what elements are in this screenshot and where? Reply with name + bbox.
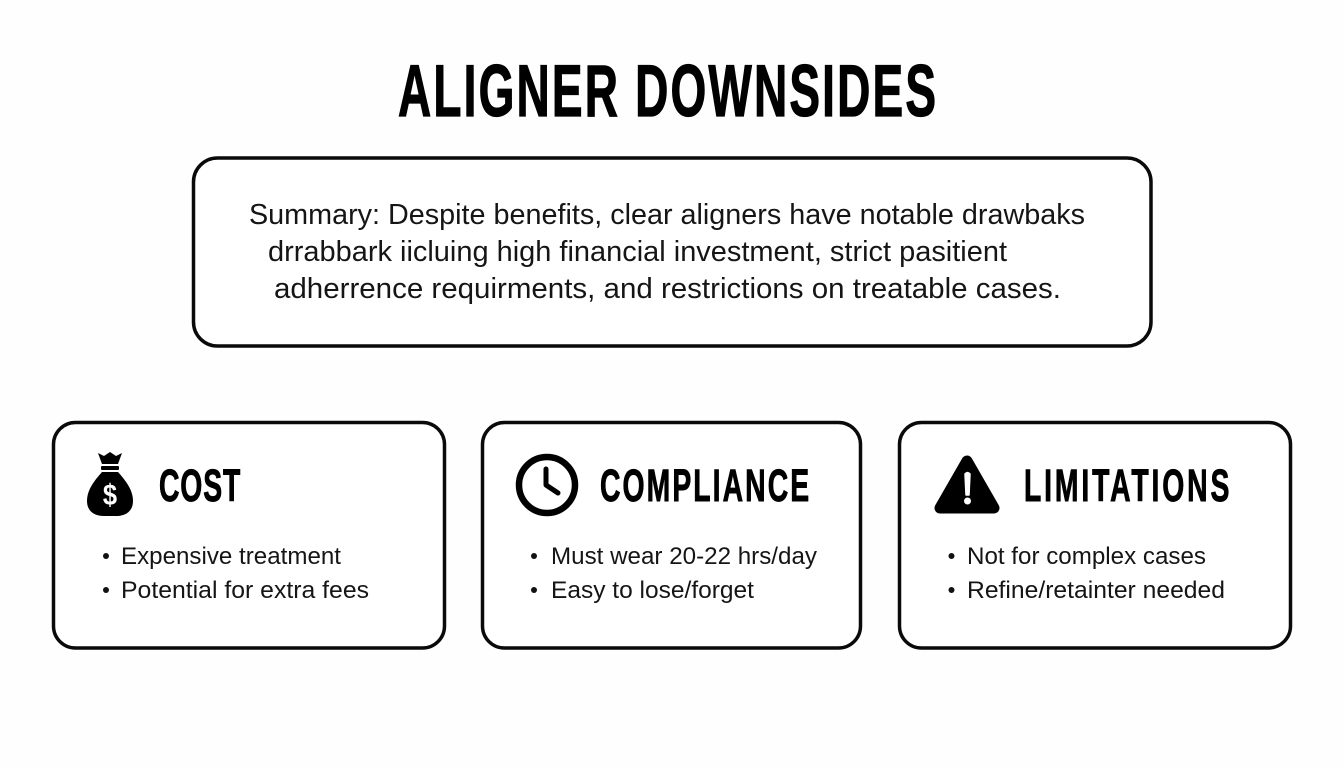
icon: clock: [519, 457, 575, 513]
summary text: drrabbark iicluing high financial investment, strict pasitient: [268, 236, 1007, 268]
bullet list: cost: Expensive treatment: [121, 543, 341, 570]
bullet list: cost: Potential for extra fees: [121, 577, 369, 604]
bullet list: limitations: Not for complex cases: [967, 543, 1206, 570]
bullet list: compliance: [531, 543, 818, 604]
bullet list: limitations: Refine/retainter needed: [967, 577, 1225, 604]
bullet list: limitations: [948, 543, 1225, 604]
bullet list: cost: [103, 543, 369, 604]
summary text: adherrence requirments, and restrictions on treatable cases.: [274, 273, 1061, 305]
panel: compliance: [482, 422, 860, 648]
icon: money bag: $: [103, 478, 118, 511]
icon: warning triangle: [940, 461, 994, 508]
title: ALIGNER DOWNSIDES: [398, 50, 936, 132]
summary text: [249, 199, 1085, 305]
summary text: Summary: Despite benefits, clear aligners have notable drawbaks: [249, 199, 1085, 231]
heading: cost: COST: [159, 460, 240, 511]
panel: summary: [194, 158, 1151, 346]
bullet list: compliance: Easy to lose/forget: [551, 577, 754, 604]
heading: limitations: LIMITATIONS: [1024, 460, 1229, 511]
panel: limitations: [900, 422, 1290, 648]
icon: money bag: [87, 452, 133, 516]
bullet list: compliance: Must wear 20-22 hrs/day: [551, 543, 818, 570]
panel: cost: [54, 422, 444, 648]
heading: compliance: COMPLIANCE: [600, 460, 809, 511]
